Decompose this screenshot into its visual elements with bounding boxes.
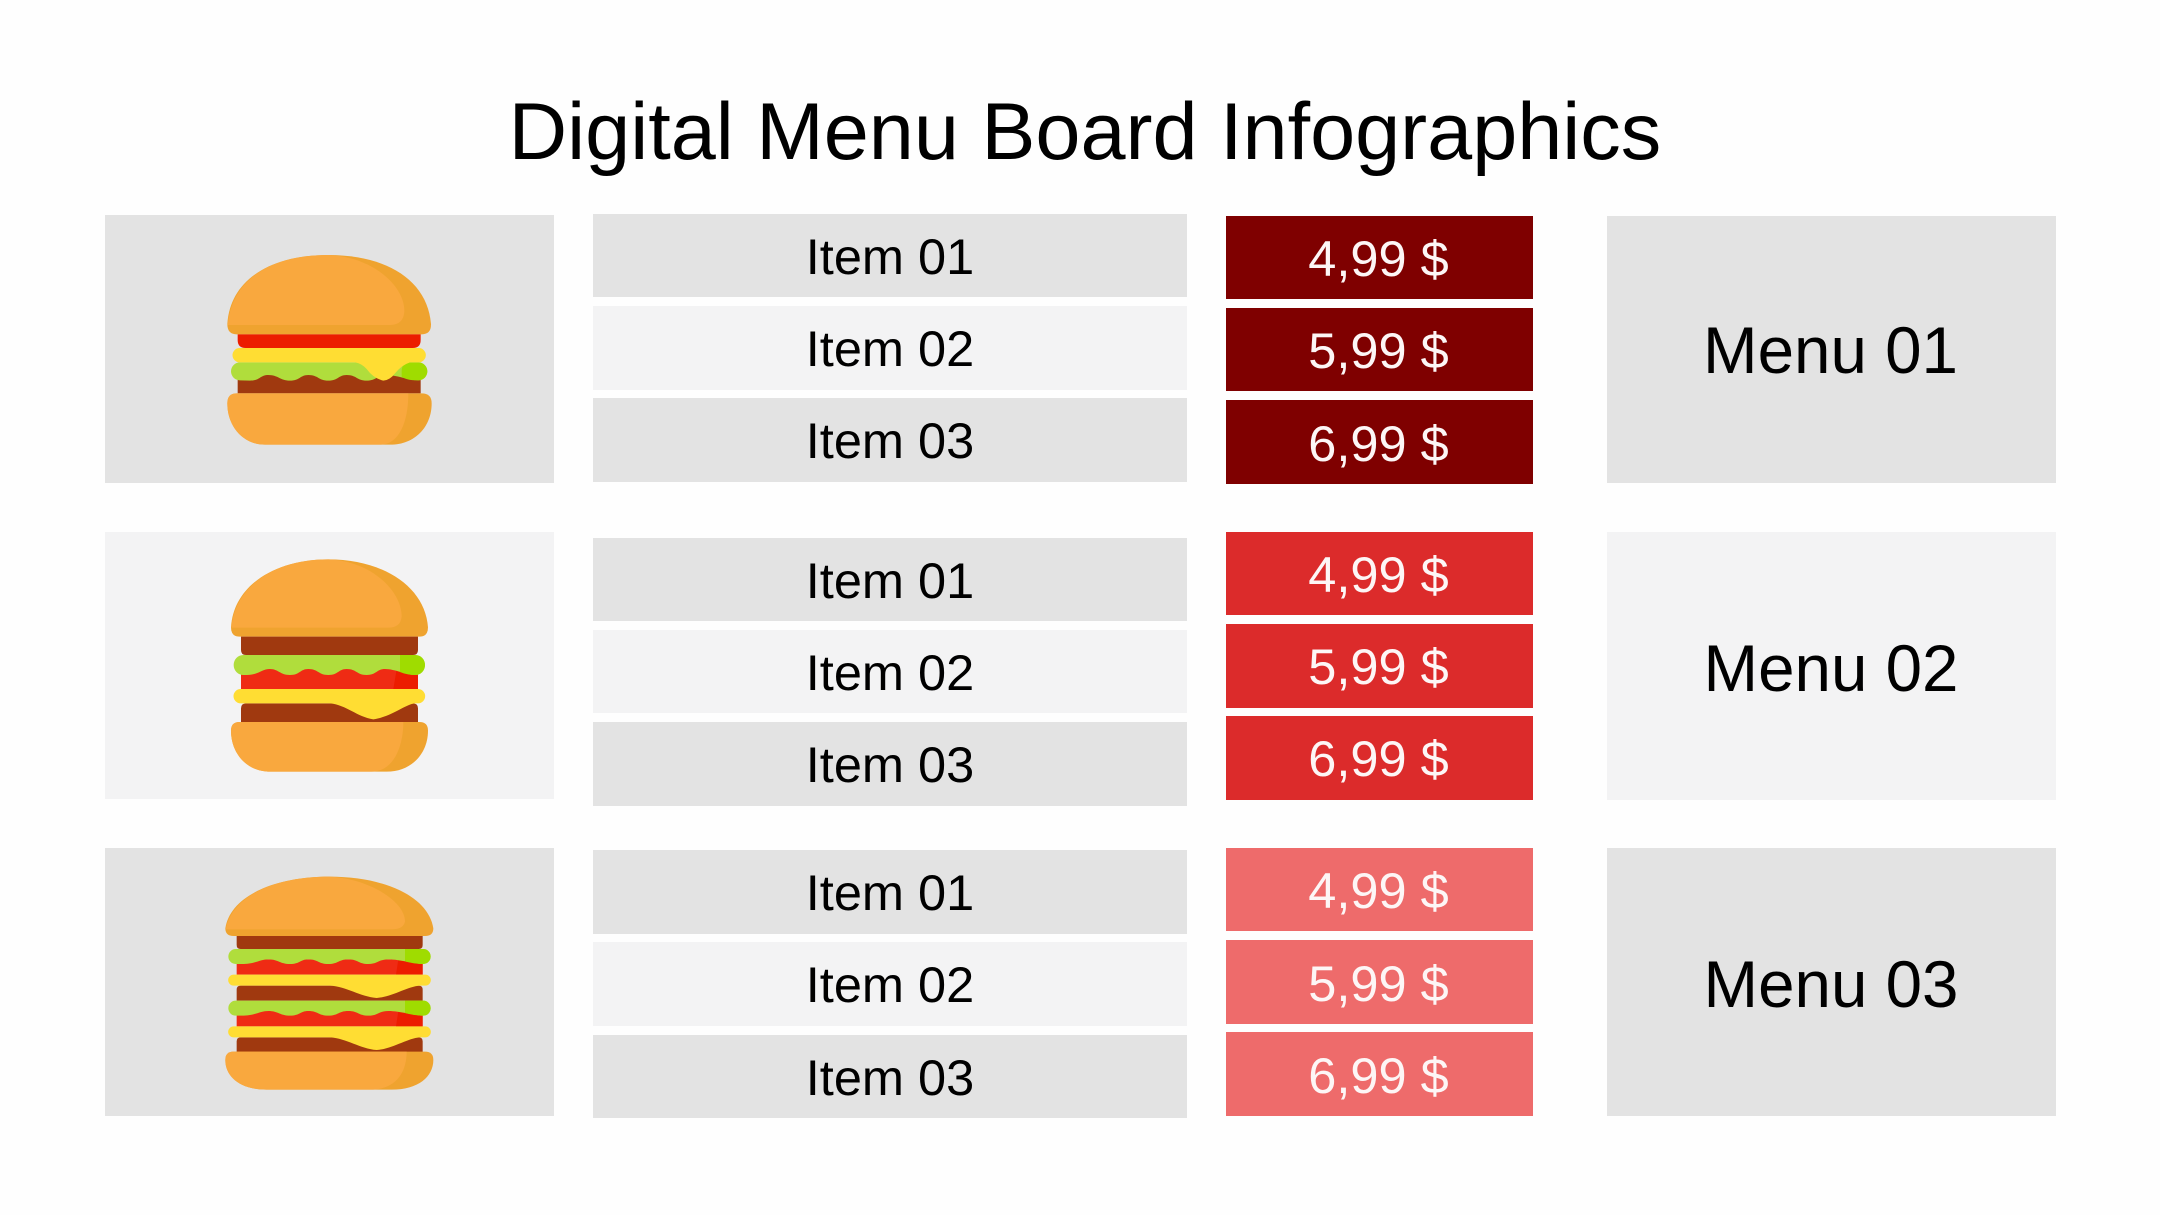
- item row: item 03: Item 03: [806, 412, 974, 469]
- icon: double-decker burger: [225, 877, 433, 1090]
- price: 5,99: [1226, 940, 1533, 1024]
- panel: menu 01 section: [105, 214, 2056, 484]
- item row: item 03: [593, 722, 1187, 806]
- panel: burger 2 image: [105, 532, 554, 799]
- menu label: Menu 01: Menu 01: [1703, 314, 1958, 387]
- item row: item 01: Item 01: [806, 864, 974, 921]
- item row: item 03: Item 03: [806, 736, 974, 793]
- price: 6,99: [1226, 716, 1533, 800]
- item row: item 03: Item 03: [806, 1049, 974, 1106]
- panel: menu 02 section: [105, 532, 2056, 806]
- price: 4,99: [1226, 216, 1533, 299]
- item row: item 02: Item 02: [806, 320, 974, 377]
- price: 5,99: 5,99 $: [1308, 322, 1449, 379]
- item row: item 02: [593, 942, 1187, 1026]
- menu label: Menu 03: Menu 03: [1704, 948, 1958, 1021]
- price: 4,99: 4,99 $: [1308, 546, 1449, 603]
- panel: burger 3 image: [105, 848, 554, 1116]
- price: 6,99: 6,99 $: [1308, 1047, 1449, 1104]
- price: 6,99: [1226, 400, 1533, 484]
- menu label: Menu 02: [1607, 532, 2056, 800]
- price: 4,99: [1226, 532, 1533, 615]
- menu label: Menu 03: [1607, 848, 2056, 1116]
- price: 5,99: [1226, 308, 1533, 391]
- price: 4,99: 4,99 $: [1308, 862, 1449, 919]
- price: 5,99: 5,99 $: [1308, 955, 1449, 1012]
- menu label: Menu 01: [1607, 216, 2056, 483]
- icon: single-layer burger: [227, 255, 432, 445]
- item row: item 01: Item 01: [806, 228, 974, 285]
- item row: item 01: [593, 214, 1187, 297]
- price: 6,99: 6,99 $: [1308, 730, 1449, 787]
- item row: item 01: [593, 850, 1187, 934]
- price: 4,99: 4,99 $: [1308, 230, 1449, 287]
- price: 6,99: [1226, 1032, 1533, 1116]
- item row: item 03: [593, 398, 1187, 482]
- item row: item 02: [593, 306, 1187, 390]
- panel: menu 03 section: [105, 848, 2056, 1118]
- panel: burger 1 image: [105, 215, 554, 483]
- price: 5,99: [1226, 624, 1533, 708]
- menu label: Menu 02: Menu 02: [1704, 632, 1958, 705]
- item row: item 02: Item 02: [806, 956, 974, 1013]
- item row: item 02: Item 02: [806, 644, 974, 701]
- item row: item 02: [593, 630, 1187, 713]
- icon: two-patty burger: [231, 559, 428, 772]
- item row: item 03: [593, 1035, 1187, 1118]
- price: 4,99: [1226, 848, 1533, 931]
- item row: item 01: [593, 538, 1187, 621]
- item row: item 01: Item 01: [806, 552, 974, 609]
- price: 6,99: 6,99 $: [1308, 415, 1449, 472]
- title: Digital Menu Board Infographics: [509, 87, 1661, 177]
- price: 5,99: 5,99 $: [1308, 638, 1449, 695]
